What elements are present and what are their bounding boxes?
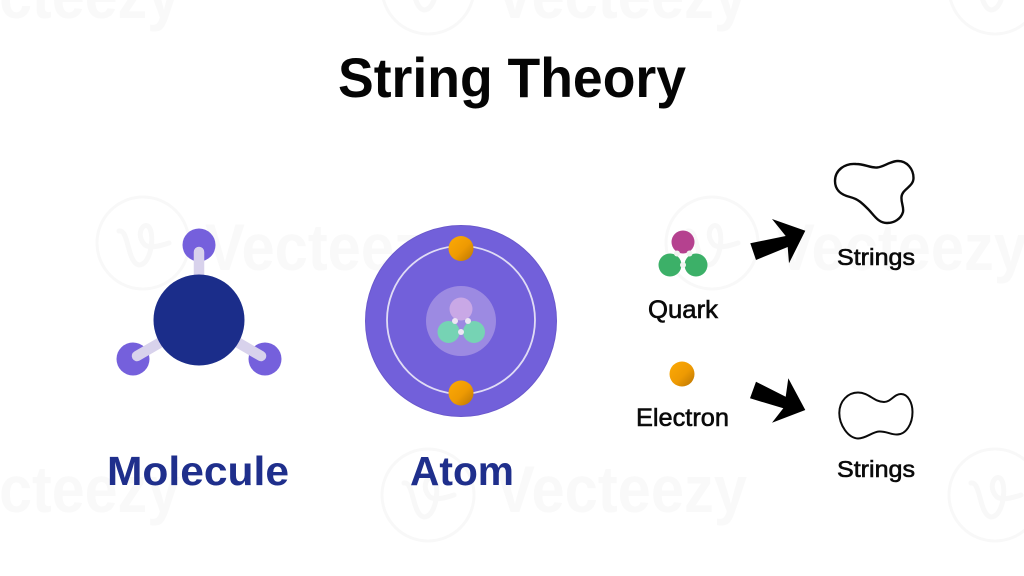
molecule bonds: [137, 252, 261, 356]
atom body: [366, 226, 556, 416]
atom electron top: [448, 236, 474, 261]
icon: quark: [658, 230, 708, 276]
watermark pattern: Vecteezy: [205, 210, 457, 284]
molecule core: [154, 274, 244, 366]
arrow: electron to strings: [750, 378, 805, 423]
molecule outer atoms: [116, 228, 282, 376]
atom nucleus: [426, 286, 496, 356]
icon: molecule: [116, 228, 282, 376]
label: strings bottom: Strings: [837, 456, 915, 482]
icon: string loop top: [835, 161, 914, 223]
watermark pattern: Vecteezy: [495, 452, 747, 526]
atom electron bottom: [448, 380, 474, 406]
icon: string loop bottom: [839, 392, 912, 438]
label: quark: Quark: [648, 296, 718, 324]
atom orbit: [387, 246, 535, 394]
arrow: quark to strings: [750, 219, 805, 263]
label: strings top: Strings: [837, 244, 915, 270]
label: electron: Electron: [636, 404, 729, 432]
title: String Theory: [338, 46, 686, 109]
label: atom: Atom: [410, 448, 514, 494]
icon: electron: [670, 362, 694, 386]
label: molecule: Molecule: [107, 448, 289, 494]
icon: atom: [366, 226, 556, 416]
